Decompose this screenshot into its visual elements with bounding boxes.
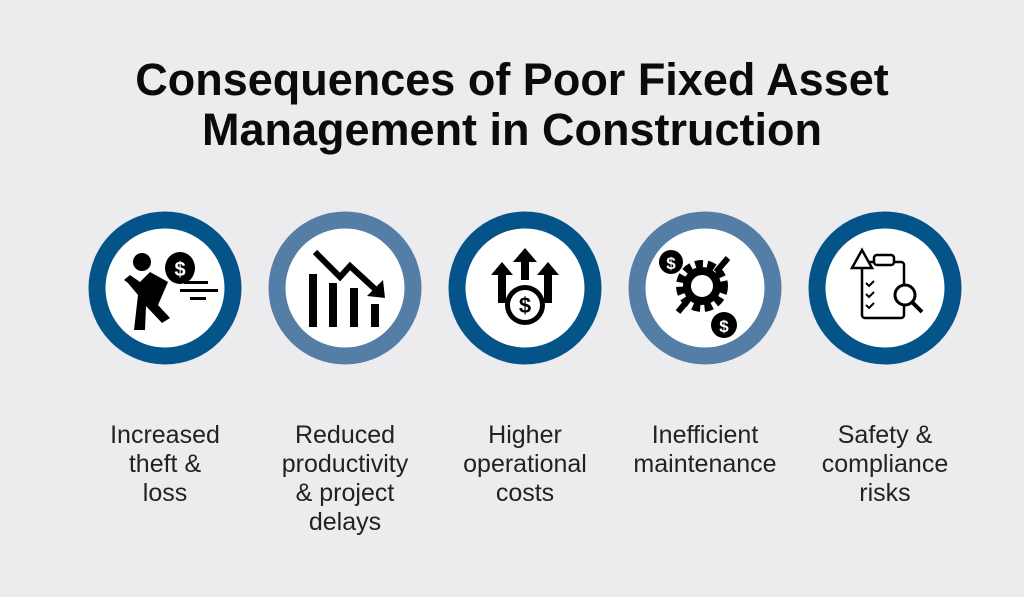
label: productivity: Reduced [295,421,395,449]
label: theft: theft & [129,450,201,478]
icon circle: theft: $ [174,259,186,281]
icon circle: costs [457,220,593,356]
icon circle: maintenance: $ [719,317,729,336]
label: productivity: productivity [282,450,408,478]
label: costs [463,421,587,507]
label: safety: Safety & [838,421,932,449]
label: theft: loss [143,479,187,507]
title [135,54,889,155]
label: safety: compliance [822,450,948,478]
label: safety [822,421,948,507]
label: productivity [282,421,408,536]
icon circle: maintenance [637,220,773,356]
label: theft [110,421,220,507]
label: theft: Increased [110,421,220,449]
icon circle: safety [817,220,953,356]
title: Consequences of Poor Fixed Asset [135,54,889,105]
label: maintenance: maintenance [633,450,777,478]
icon circle: productivity [277,220,413,356]
label: costs: operational [463,450,587,478]
title: Management in Construction [202,104,822,155]
icon circle: maintenance: $ [666,254,676,273]
icon circle: theft [97,220,233,356]
label: maintenance [633,421,777,478]
label: productivity: & project [296,479,394,507]
icon circle: costs: $ [519,293,531,318]
label: maintenance: Inefficient [652,421,758,449]
label: safety: risks [859,479,911,507]
label: productivity: delays [309,508,381,536]
label: costs: Higher [488,421,562,449]
label: costs: costs [496,479,554,507]
